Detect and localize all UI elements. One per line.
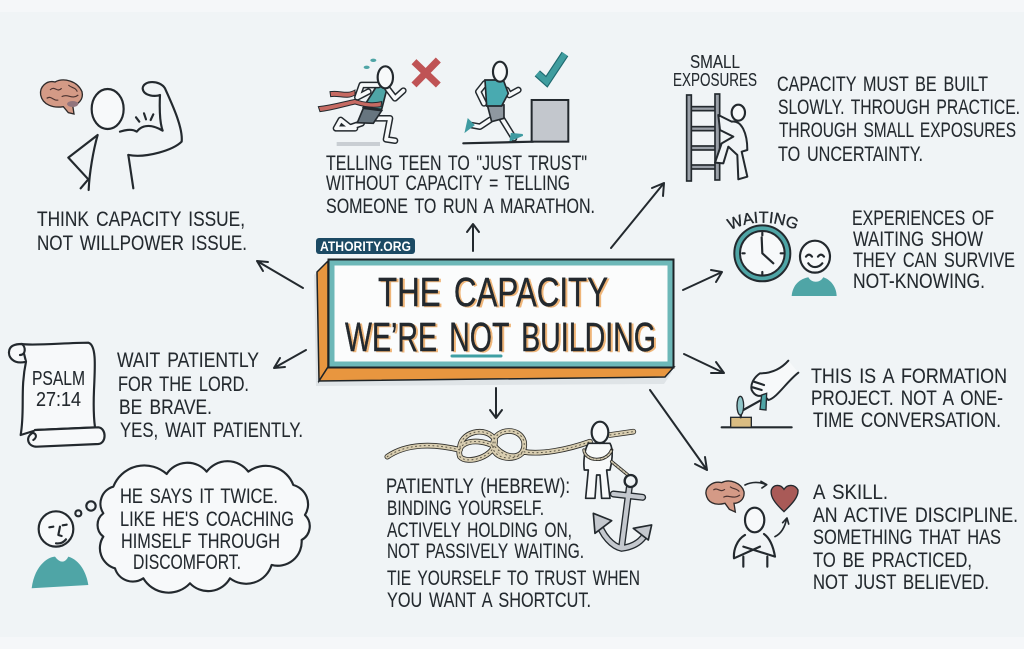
bubble text: HIMSELF THROUGH — [121, 529, 280, 553]
icon: rope knot, tied person and anchor — [387, 422, 652, 548]
central title panel — [314, 260, 674, 386]
text: waiting experiences: WAITING SHOW — [853, 227, 984, 251]
icon: hand tending a plant — [722, 361, 798, 427]
text: marathon — [326, 151, 595, 218]
icon: scroll psalm 27:14: PSALM — [32, 368, 85, 390]
icon: brain and flexing figure — [41, 80, 182, 190]
bubble text — [120, 484, 294, 574]
text: psalm verse: YES, WAIT PATIENTLY. — [120, 418, 303, 442]
title text: THE CAPACITY — [378, 269, 608, 315]
text: waiting experiences: NOT-KNOWING. — [853, 269, 985, 293]
text: patiently hebrew: NOT PASSIVELY WAITING. — [387, 539, 584, 563]
icon: clock and smiling person: WAITING — [726, 212, 798, 229]
text: psalm verse: FOR THE LORD. — [118, 372, 249, 396]
text: capacity must be built — [777, 72, 1020, 166]
text: patiently hebrew: TIE YOURSELF TO TRUST WHEN — [387, 566, 640, 590]
text: waiting experiences — [852, 206, 1015, 293]
text: a skill: TO BE PRACTICED, — [813, 548, 972, 572]
bubble text: LIKE HE'S COACHING — [120, 507, 294, 531]
text: marathon: TELLING TEEN TO "JUST TRUST" — [326, 151, 587, 175]
text: willpower: THINK CAPACITY ISSUE, — [37, 207, 245, 231]
bubble text: HE SAYS IT TWICE. — [120, 484, 278, 508]
text: marathon: SOMEONE TO RUN A MARATHON. — [326, 194, 595, 218]
text: marathon: WITHOUT CAPACITY = TELLING — [326, 171, 570, 195]
icon: ladder with label small exposures: SMALL — [690, 52, 740, 72]
text: willpower — [37, 207, 247, 255]
icon: ladder with label small exposures: EXPOSURES — [673, 70, 757, 90]
text: formation project — [811, 364, 1007, 432]
text: capacity must be built: TO UNCERTAINTY. — [778, 142, 923, 166]
text: patiently hebrew: BINDING YOURSELF. — [387, 496, 544, 520]
text: patiently hebrew: PATIENTLY (HEBREW): — [386, 474, 570, 498]
text: patiently hebrew: YOU WANT A SHORTCUT. — [387, 588, 591, 612]
text: psalm verse: BE BRAVE. — [119, 395, 212, 419]
text: patiently hebrew — [386, 474, 640, 612]
text: a skill: A SKILL. — [813, 480, 888, 504]
icon: thinking person — [32, 501, 96, 588]
title text — [345, 269, 656, 360]
icon: brain, heart and person with crossed arms — [706, 481, 798, 567]
icon: ladder with label small exposures — [673, 52, 757, 181]
text: a skill — [813, 480, 1018, 594]
arrows from the centre — [257, 183, 724, 470]
text: psalm verse: WAIT PATIENTLY — [117, 348, 259, 372]
icon: clock and smiling person — [726, 212, 837, 296]
icon: runners with cross and check — [318, 54, 568, 146]
badge: athority.org: ATHORITY.ORG — [320, 239, 411, 254]
icon: scroll psalm 27:14: 27:14 — [36, 389, 81, 411]
text: psalm verse — [117, 348, 303, 442]
text: willpower: NOT WILLPOWER ISSUE. — [37, 231, 247, 255]
thought bubble — [98, 461, 310, 593]
icon: scroll psalm 27:14 — [9, 343, 105, 447]
bubble text: DISCOMFORT. — [133, 550, 241, 574]
text: patiently hebrew: ACTIVELY HOLDING ON, — [387, 518, 572, 542]
title text: WE’RE NOT BUILDING — [345, 314, 656, 360]
